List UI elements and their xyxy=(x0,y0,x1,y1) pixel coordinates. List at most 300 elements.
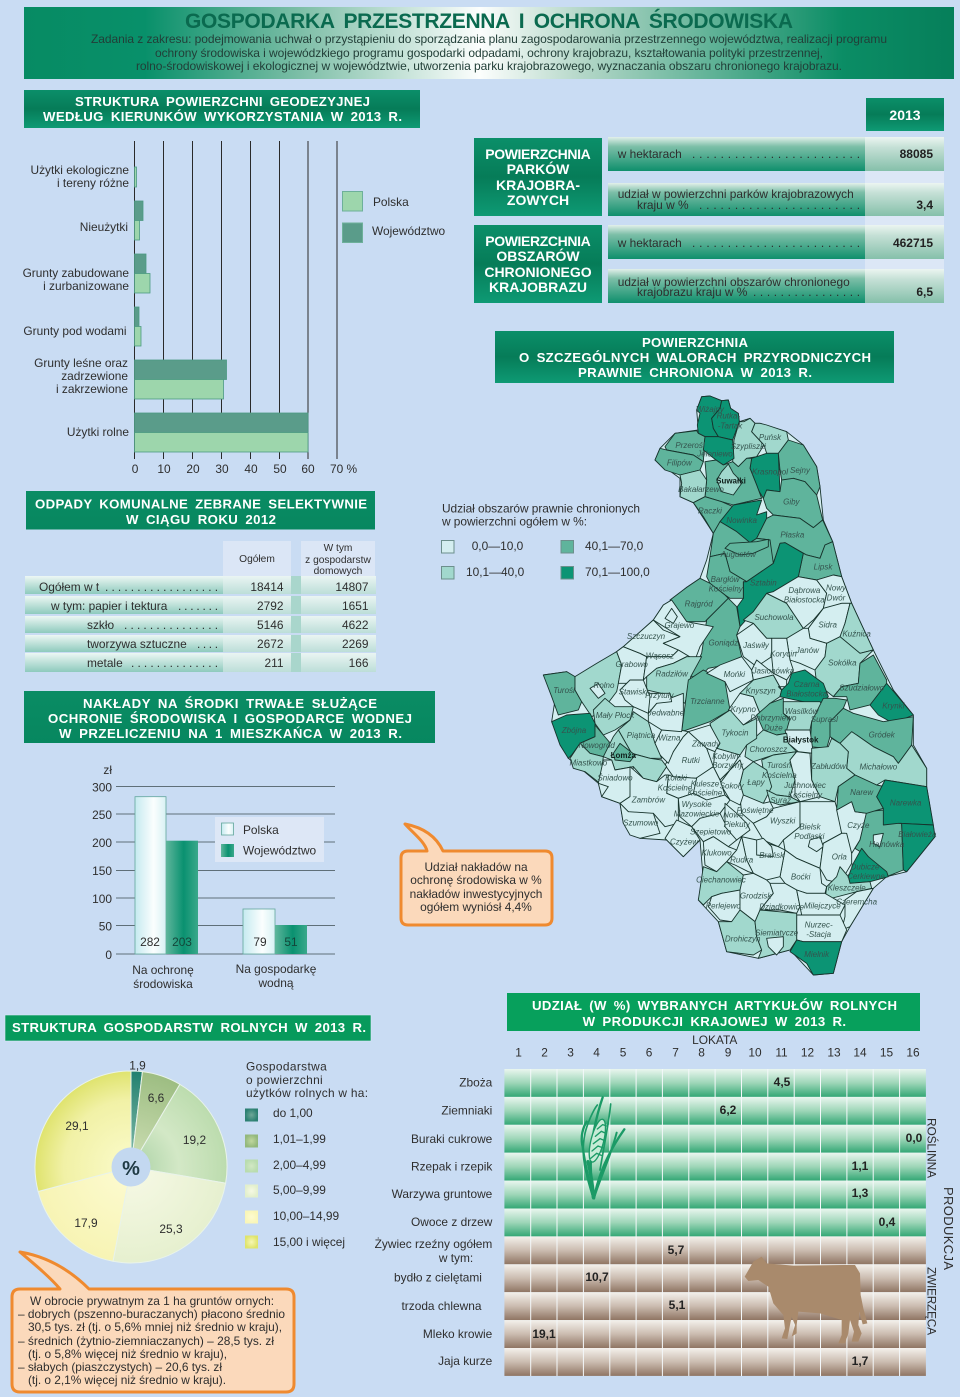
heading: odpady komunalne: W CIĄGU ROKU 2012 xyxy=(126,512,276,527)
commune labels: Raczki xyxy=(698,506,722,515)
commune labels: Siemiatycze xyxy=(755,928,799,937)
legend: farm size xyxy=(245,1060,368,1249)
column headers: z gospodarstw xyxy=(305,555,371,566)
column numbers: 14 xyxy=(853,1046,867,1060)
commune labels: Dobrzyniewo xyxy=(750,713,797,722)
commune labels: Rutki xyxy=(682,756,700,765)
data rows xyxy=(608,137,944,303)
bar chart: nakłady: Na ochronę xyxy=(132,963,194,977)
commune labels: Wysokie xyxy=(682,800,712,809)
table: odpady: . . . . . . . xyxy=(178,599,218,613)
callout: udział nakładów: ogółem wyniósł 4,4% xyxy=(420,900,532,914)
column numbers: 4 xyxy=(593,1046,600,1060)
data rows: kraju w % xyxy=(637,198,689,212)
pie chart: farm structure: 25,3 xyxy=(159,1222,183,1236)
legend: farm size: użytków rolnych w ha: xyxy=(246,1086,368,1100)
callout: ceny gruntów: (tj. o 2,1% więcej niż średnio w kraju). xyxy=(28,1373,226,1387)
values: 1,3 xyxy=(852,1186,869,1200)
column headers: W tym xyxy=(324,543,352,554)
bar chart: nakłady: wodną xyxy=(257,976,294,990)
commune labels: Kleszczele xyxy=(828,884,866,893)
box label: obszary chronionego krajobrazu: OBSZARÓW xyxy=(496,247,580,264)
pie chart: farm structure: 17,9 xyxy=(74,1216,98,1230)
box label: parki: KRAJOBRA- xyxy=(496,177,580,193)
commune labels: Płaska xyxy=(780,530,805,539)
commune labels: Stawiski xyxy=(619,688,648,697)
commune labels: Zawady xyxy=(691,739,721,748)
heading: struktura gospodarstw: STRUKTURA GOSPODARSTW ROLNYCH W 2013 R. xyxy=(12,1020,366,1035)
commune labels: Gródek xyxy=(869,730,896,739)
column numbers: 11 xyxy=(775,1046,788,1060)
heading: udział w produkcji: W PRODUKCJI KRAJOWEJ W 2013 R. xyxy=(583,1014,846,1029)
commune labels: Kościelny xyxy=(788,790,823,799)
table: odpady: 2672 xyxy=(257,637,284,651)
commune labels: Białostocka xyxy=(784,595,825,604)
icon: wheat xyxy=(582,1097,624,1198)
column numbers: 13 xyxy=(827,1046,841,1060)
column numbers xyxy=(515,1033,920,1060)
commune labels: Czeremcha xyxy=(836,898,878,907)
data rows: krajobrazu kraju w % xyxy=(637,285,748,299)
row labels: Warzywa gruntowe xyxy=(392,1187,493,1201)
callout: ceny gruntów: – dobrych (pszenno-buraczanych) płacono średnio xyxy=(18,1307,285,1321)
commune labels: -Stacja xyxy=(806,930,832,939)
commune labels: Dubicze xyxy=(851,863,880,872)
column headers: domowych xyxy=(314,566,362,577)
heading: powierzchnia chroniona xyxy=(495,331,894,383)
heading: udział w produkcji xyxy=(507,993,920,1031)
grid rows xyxy=(504,1069,926,1376)
commune labels: Miastkowo xyxy=(569,759,608,768)
bar chart: nakłady: 200 xyxy=(92,836,112,850)
commune labels: Brańsk xyxy=(759,851,785,860)
commune labels: Janów xyxy=(795,646,820,655)
data rows: udział w powierzchni obszarów chronionego xyxy=(618,275,850,289)
commune labels xyxy=(553,405,937,959)
commune labels: Wąsosz xyxy=(646,651,674,660)
box label: obszary chronionego krajobrazu: POWIERZCHNIA xyxy=(485,233,591,249)
row labels: Mleko krowie xyxy=(423,1327,493,1341)
table: odpady: . . . . . . . . . . . . . . xyxy=(131,656,218,670)
callout: ceny gruntów: W obrocie prywatnym za 1 ha gruntów ornych: xyxy=(30,1294,274,1308)
row labels: Żywiec rzeźny ogółem xyxy=(375,1237,492,1251)
heading: odpady komunalne: ODPADY KOMUNALNE ZEBRANE SELEKTYWNIE xyxy=(35,497,367,512)
column numbers: 3 xyxy=(567,1046,574,1060)
commune labels: Dwór xyxy=(827,593,846,602)
commune labels: Grabowo xyxy=(615,660,648,669)
legend: land use: Polska xyxy=(373,195,409,209)
commune labels: Hajnówka xyxy=(869,840,905,849)
column numbers: 10 xyxy=(748,1046,762,1060)
category labels: Grunty pod wodami xyxy=(23,324,126,338)
axis labels: 60 xyxy=(301,462,315,476)
commune labels: Przerośl xyxy=(675,441,705,450)
heading: nakłady: OCHRONIE ŚRODOWISKA I GOSPODARCE WODNEJ xyxy=(48,711,412,726)
category labels: Nieużytki xyxy=(80,220,128,234)
legend: Polska xyxy=(243,823,279,837)
commune labels: Mielnik xyxy=(804,950,830,959)
commune labels: Nowinka xyxy=(726,516,758,525)
commune labels: Rajgród xyxy=(685,599,713,608)
heading: struktura powierzchni: WEDŁUG KIERUNKÓW WYKORZYSTANIA W 2013 R. xyxy=(43,109,402,124)
intro text: ochrony środowiska i wojewódzkiego programu gospodarki odpadami, ochrony krajobrazu, kształtowania polityki przestrzennej, xyxy=(155,46,823,60)
legend: farm size: 15,00 i więcej xyxy=(273,1235,345,1249)
bar chart: nakłady: 100 xyxy=(92,892,112,906)
commune labels: Czyżew xyxy=(670,838,699,847)
commune labels: Radziłów xyxy=(655,669,689,678)
bar chart: nakłady: 50 xyxy=(99,920,112,934)
column numbers: 2 xyxy=(541,1046,548,1060)
category labels: i zakrzewione xyxy=(56,382,128,396)
pie chart: farm structure: 6,6 xyxy=(148,1091,165,1105)
category labels: Użytki rolne xyxy=(67,425,129,439)
commune labels: Milejczyce xyxy=(804,902,841,911)
commune labels: Jedwabne xyxy=(647,709,685,718)
heading: struktura powierzchni xyxy=(24,90,420,128)
icon: cow xyxy=(745,1257,867,1343)
commune labels: Mały Płock xyxy=(596,711,635,720)
table: odpady: 166 xyxy=(349,656,369,670)
column numbers: 16 xyxy=(906,1046,920,1060)
commune labels: Śniadowo xyxy=(597,773,633,782)
box label: parki xyxy=(474,138,602,216)
column numbers: 6 xyxy=(646,1046,653,1060)
table: odpady: 14807 xyxy=(335,580,369,594)
callout: ceny gruntów: – słabych (piaszczystych) – 20,6 tys. zł xyxy=(18,1360,222,1374)
title: GOSPODARKA PRZESTRZENNA I OCHRONA ŚRODOWISKA xyxy=(185,9,793,33)
intro text: rolno-środowiskowej i ekologicznej w województwie, utworzenia parku krajobrazowego, wyznaczania obszaru chronionego krajobrazu. xyxy=(136,59,842,73)
category labels: Użytki ekologiczne xyxy=(31,163,129,177)
commune labels: Augustów xyxy=(720,550,757,559)
commune labels: Czarna xyxy=(794,680,820,689)
heading: struktura powierzchni: STRUKTURA POWIERZCHNI GEODEZYJNEJ xyxy=(75,94,370,109)
legend: farm size: 5,00–9,99 xyxy=(273,1183,326,1197)
commune labels: Łomża xyxy=(611,751,637,760)
commune labels: Grodzisk xyxy=(740,892,772,901)
bar chart: nakłady: środowiska xyxy=(133,977,193,991)
side labels: produkcja: PRODUKCJA xyxy=(941,1187,956,1270)
column numbers: 8 xyxy=(698,1046,705,1060)
values: 1,1 xyxy=(852,1159,869,1173)
category labels: i tereny różne xyxy=(57,176,129,190)
commune labels: Mońki xyxy=(724,670,745,679)
heading: struktura gospodarstw xyxy=(5,1015,371,1041)
values xyxy=(532,1075,923,1368)
table: odpady: tworzywa sztuczne xyxy=(87,637,187,651)
column headers xyxy=(223,541,375,577)
bar chart: land use structure xyxy=(23,141,358,476)
commune labels: Nurzec- xyxy=(805,920,833,929)
category labels: zadrzewione xyxy=(61,369,128,383)
commune labels: Szudziałowo xyxy=(839,684,885,693)
commune labels: Suwałki xyxy=(716,477,746,486)
commune labels: Boćki xyxy=(791,873,811,882)
callout: ceny gruntów: 30,5 tys. zł (tj. o 5,6% mniej niż średnio w kraju), xyxy=(28,1320,282,1334)
column headers: Ogółem xyxy=(239,554,275,565)
commune labels: Krypno xyxy=(731,705,757,714)
column numbers: 12 xyxy=(801,1046,814,1060)
commune labels: Zbójna xyxy=(561,726,587,735)
commune labels: Choroszcz xyxy=(749,745,787,754)
commune labels: Nowogród xyxy=(578,741,615,750)
rank chart: lokata xyxy=(375,1033,926,1376)
commune labels: Kościelne xyxy=(688,789,723,798)
commune labels: Dziadkowice xyxy=(759,903,805,912)
data rows: 6,5 xyxy=(916,285,933,299)
commune labels: Wasilków xyxy=(785,707,820,716)
commune labels: Korycin xyxy=(770,649,797,658)
row labels: bydło z cielętami xyxy=(394,1271,482,1285)
row labels: trzoda chlewna xyxy=(402,1299,482,1313)
commune labels: Supraśl xyxy=(811,715,838,724)
legend: farm size: o powierzchni xyxy=(246,1073,323,1087)
table: odpady: metale xyxy=(87,656,123,670)
commune labels: Jeleniewo xyxy=(696,449,733,458)
data rows: w hektarach xyxy=(617,147,682,161)
values: 19,1 xyxy=(532,1327,556,1341)
commune labels: Knyszyn xyxy=(746,687,776,696)
table: odpady: Ogółem w t xyxy=(39,580,100,594)
table: odpady: 211 xyxy=(265,656,284,670)
axis labels xyxy=(132,462,358,476)
map of podlaskie communes xyxy=(543,396,937,975)
table: odpady xyxy=(25,541,376,672)
table: odpady: 1651 xyxy=(342,599,369,613)
commune labels: Cerkiewne xyxy=(847,872,885,881)
map legend: 40,1—70,0 xyxy=(585,539,644,553)
commune labels: Filipów xyxy=(667,459,693,468)
bar chart: nakłady: 150 xyxy=(92,864,112,878)
commune labels: Wyszki xyxy=(770,817,796,826)
box label: parki: PARKÓW xyxy=(507,160,570,177)
heading: powierzchnia chroniona: POWIERZCHNIA xyxy=(642,335,748,350)
table: odpady: 18414 xyxy=(250,580,284,594)
commune labels: Ciechanowiec xyxy=(696,875,746,884)
commune labels: Nowy xyxy=(826,584,847,593)
commune labels: Kościelna xyxy=(762,771,797,780)
commune labels: Kuźnica xyxy=(842,629,871,638)
axis labels: 70 % xyxy=(330,462,358,476)
commune labels: Kościelne xyxy=(658,783,693,792)
commune labels: Juchnowiec xyxy=(783,781,826,790)
map legend: 0,0—10,0 xyxy=(472,539,524,553)
commune labels: Michałowo xyxy=(859,763,898,772)
commune labels: Rolno xyxy=(594,681,615,690)
intro text xyxy=(91,32,887,73)
commune labels: Bielsk xyxy=(799,823,822,832)
row labels xyxy=(375,1076,493,1368)
row labels: Buraki cukrowe xyxy=(411,1132,493,1146)
pie chart: farm structure xyxy=(35,1058,227,1263)
commune labels: Piątnica xyxy=(627,731,656,740)
commune labels: Białostocka xyxy=(786,689,828,698)
values: 5,1 xyxy=(669,1298,686,1312)
intro text: Zadania z zakresu: podejmowania uchwał o przystąpieniu do sporządzania planu zagospodarowania przestrzennego województwa, realizacji programu xyxy=(91,32,887,46)
commune labels: Szczuczyn xyxy=(627,632,666,641)
bar chart: nakłady: 79 xyxy=(253,935,267,949)
legend: farm size: 1,01–1,99 xyxy=(273,1132,326,1146)
bar chart: nakłady: Na gospodarkę xyxy=(236,962,317,976)
year header 2013 xyxy=(866,98,944,131)
table: odpady: . . . . xyxy=(197,637,218,651)
commune labels: Dąbrowa xyxy=(788,586,821,595)
heading: nakłady xyxy=(24,691,435,743)
axis labels: 10 xyxy=(157,462,171,476)
bar chart: nakłady: 203 xyxy=(172,935,192,949)
legend: farm size: Gospodarstwa xyxy=(246,1060,327,1074)
column numbers: 7 xyxy=(672,1046,679,1060)
commune labels: Wizna xyxy=(658,733,681,742)
table: odpady: szkło xyxy=(87,618,114,632)
map legend: 70,1—100,0 xyxy=(585,565,650,579)
bar chart: nakłady: 300 xyxy=(92,780,112,794)
legend: farm size: do 1,00 xyxy=(273,1106,313,1120)
commune labels: Sejny xyxy=(790,466,811,475)
column numbers: LOKATA xyxy=(692,1033,737,1047)
values: 1,7 xyxy=(852,1354,869,1368)
commune labels: Wiżajny xyxy=(696,405,725,414)
commune labels: Grajewo xyxy=(664,621,695,630)
commune labels: Borzymy xyxy=(712,761,744,770)
commune labels: Turośl xyxy=(553,686,575,695)
side labels: produkcja: ZWIERZĘCA xyxy=(924,1267,938,1335)
box label: obszary chronionego krajobrazu: KRAJOBRAZU xyxy=(489,279,587,295)
values: 5,7 xyxy=(668,1243,685,1257)
commune labels: Bakałarzewo xyxy=(678,485,724,494)
values: 10,7 xyxy=(585,1270,609,1284)
callout: udział nakładów xyxy=(401,824,552,925)
table: odpady: w tym: papier i tektura xyxy=(50,599,168,613)
year header 2013: 2013 xyxy=(889,107,921,123)
column numbers: 1 xyxy=(515,1046,522,1060)
commune labels: Podlaski xyxy=(794,832,825,841)
table: odpady: . . . . . . . . . . . . . . . xyxy=(124,618,218,632)
row labels: Owoce z drzew xyxy=(411,1215,493,1229)
commune labels: Perlejewo xyxy=(706,902,741,911)
commune labels: Zabłudów xyxy=(810,762,847,771)
commune labels: -Tartak xyxy=(718,422,743,431)
map legend: 10,1—40,0 xyxy=(466,565,525,579)
data rows: . . . . . . . . . . . . . . . . . . . . . . . . xyxy=(692,236,860,250)
commune labels: Duże xyxy=(764,723,783,732)
bar chart: nakłady: 0 xyxy=(105,948,112,962)
commune labels: Narewka xyxy=(890,798,922,807)
callout: ceny gruntów: (tj. o 5,8% więcej niż średnio w kraju), xyxy=(28,1347,227,1361)
commune labels: Mazowieckie xyxy=(674,809,720,818)
bar chart: nakłady xyxy=(92,763,335,991)
commune labels: Przytuły xyxy=(645,691,675,700)
commune labels: Zambrów xyxy=(631,795,666,804)
legend: farm size: 2,00–4,99 xyxy=(273,1158,326,1172)
bar chart: nakłady: 282 xyxy=(140,935,160,949)
data rows: . . . . . . . . . . . . . . . . . . . . . . . xyxy=(699,198,860,212)
data rows: w hektarach xyxy=(617,236,682,250)
legend xyxy=(215,817,324,862)
row labels: Rzepak i rzepik xyxy=(411,1160,492,1174)
commune labels: Lipsk xyxy=(814,563,833,572)
commune labels: Kulesze xyxy=(691,779,720,788)
category labels: i zurbanizowane xyxy=(43,279,129,293)
panel: parki krajobrazowe xyxy=(474,137,944,303)
commune labels: Poświętne xyxy=(737,806,774,815)
axis labels: 40 xyxy=(244,462,258,476)
map legend xyxy=(441,502,650,579)
data rows: 88085 xyxy=(900,147,933,161)
data rows: udział w powierzchni parków krajobrazowych xyxy=(618,187,854,201)
commune labels: Jasionówka xyxy=(751,667,795,676)
column numbers: 15 xyxy=(880,1046,893,1060)
axis labels: 20 xyxy=(186,462,200,476)
pie chart: farm structure: 29,1 xyxy=(65,1119,89,1133)
commune labels: Kobylin- xyxy=(712,752,741,761)
data rows: . . . . . . . . . . . . . . . . . . . . . . . . xyxy=(692,147,860,161)
callout: udział nakładów: nakładów inwestycyjnych xyxy=(410,887,542,901)
commune labels: Klukowo xyxy=(702,849,732,858)
values: 0,4 xyxy=(879,1215,896,1229)
commune labels: Jaświły xyxy=(742,641,770,650)
values: 0,0 xyxy=(906,1131,923,1145)
commune labels: Goniądz xyxy=(708,639,738,648)
heading: udział w produkcji: UDZIAŁ (W %) WYBRANYCH ARTYKUŁÓW ROLNYCH xyxy=(532,998,897,1013)
commune labels: Suchowola xyxy=(754,613,794,622)
column numbers: 9 xyxy=(725,1046,732,1060)
commune labels: Rudka xyxy=(730,855,754,864)
box label: parki: ZOWYCH xyxy=(507,192,569,208)
category labels: Grunty zabudowane xyxy=(23,266,129,280)
commune labels: Turośń xyxy=(767,761,792,770)
axis labels: 30 xyxy=(215,462,229,476)
bar chart: nakłady: zł xyxy=(103,763,112,777)
category labels xyxy=(23,163,129,439)
values: 4,5 xyxy=(774,1075,791,1089)
heading: powierzchnia chroniona: O SZCZEGÓLNYCH WALORACH PRZYRODNICZYCH xyxy=(519,350,871,365)
table: odpady: 2792 xyxy=(257,599,284,613)
commune labels: Białowieża xyxy=(898,830,937,839)
commune labels: Łapy xyxy=(747,778,766,787)
legend: Województwo xyxy=(243,844,317,858)
callout: udział nakładów: ochronę środowiska w % xyxy=(410,873,542,887)
commune labels: Krasnopol xyxy=(752,468,788,477)
side labels: produkcja: ROŚLINNA xyxy=(924,1118,940,1178)
box label: parki: POWIERZCHNIA xyxy=(485,146,591,162)
axis labels: 0 xyxy=(132,462,139,476)
data rows: 462715 xyxy=(893,236,933,250)
table: odpady: 2269 xyxy=(342,637,369,651)
commune labels: Giby xyxy=(783,498,801,507)
row labels: w tym: xyxy=(438,1251,473,1265)
commune labels: Drohiczyn xyxy=(725,934,761,943)
commune labels: Szypliszki xyxy=(731,442,766,451)
data rows: . . . . . . . . . . . . . . . . xyxy=(753,285,860,299)
commune labels: Szumowo xyxy=(623,819,659,828)
commune labels: Białystok xyxy=(783,735,819,744)
heading: odpady komunalne xyxy=(26,491,375,530)
callout: ceny gruntów xyxy=(12,1252,294,1392)
side labels: produkcja xyxy=(924,1118,956,1335)
commune labels: Suraż xyxy=(770,796,791,805)
row labels: Jaja kurze xyxy=(438,1354,493,1368)
commune labels: Narew xyxy=(850,788,874,797)
legend: land use: Województwo xyxy=(372,224,446,238)
callout: udział nakładów: Udział nakładów na xyxy=(424,860,528,874)
commune labels: Tykocin xyxy=(722,729,749,738)
values: 6,2 xyxy=(720,1103,737,1117)
commune labels: Trzcianne xyxy=(690,697,725,706)
pie chart: farm structure: 1,9 xyxy=(129,1058,146,1072)
commune labels: Bargłów xyxy=(711,575,741,584)
commune labels: Orla xyxy=(832,853,847,862)
commune labels: Sztabin xyxy=(750,579,777,588)
